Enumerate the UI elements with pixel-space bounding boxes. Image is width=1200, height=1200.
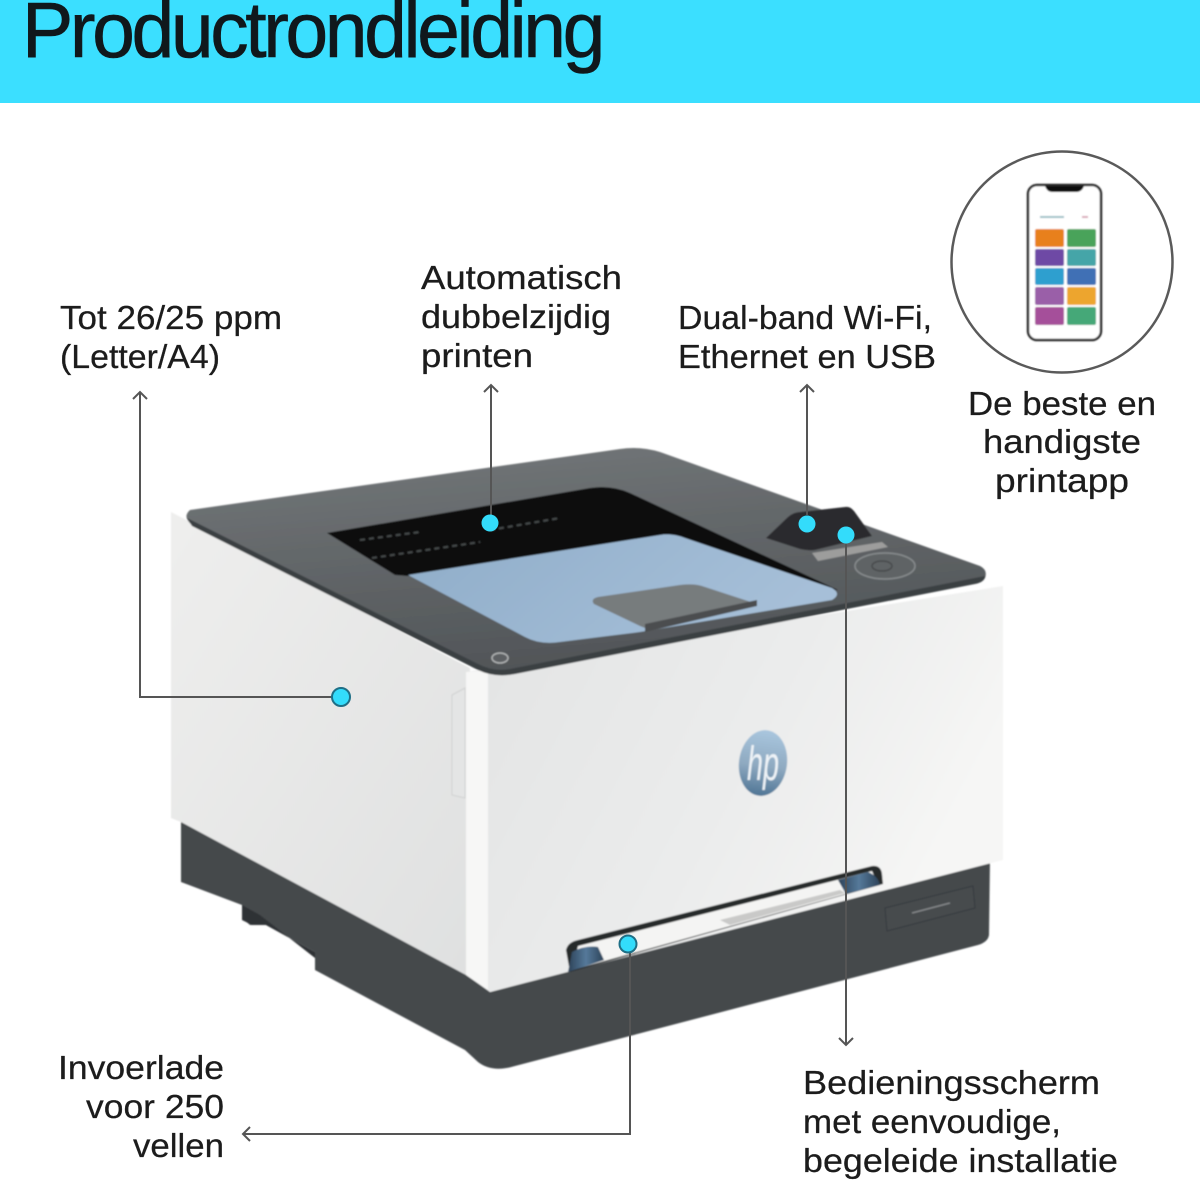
printer base (181, 820, 990, 1069)
header banner (0, 0, 1200, 103)
paper slot (566, 866, 883, 972)
lid front edge shadow (187, 518, 985, 675)
side latch (452, 688, 465, 798)
text: duplex: dubbelzijdig (421, 298, 611, 335)
hp logo (735, 727, 791, 799)
text: app: printapp (995, 462, 1129, 499)
control panel (766, 507, 915, 579)
hp logo: hp (747, 738, 779, 791)
text: duplex: printen (421, 337, 533, 374)
text: duplex: Automatisch (421, 259, 622, 296)
text: app: De beste en (968, 385, 1156, 422)
printer side panel (171, 512, 470, 975)
text: connectivity: Ethernet en USB (678, 338, 936, 375)
text: speed: Tot 26/25 ppm (60, 299, 282, 336)
phone app callout (952, 152, 1172, 372)
text: control panel: begeleide installatie (803, 1142, 1118, 1179)
model label plate (885, 886, 975, 931)
text: paper tray: vellen (133, 1127, 224, 1164)
printer front panel (466, 586, 1003, 992)
tray extension handle (593, 584, 757, 632)
marker: connectivity (798, 516, 816, 532)
text: duplex (421, 259, 622, 374)
output opening (327, 487, 838, 590)
front corner strip (466, 670, 488, 990)
arrow: control panel (839, 544, 853, 1045)
printer lid (186, 448, 986, 674)
marker: control panel (838, 526, 854, 544)
arrow: paper tray (243, 952, 630, 1141)
text: connectivity: Dual-band Wi-Fi, (678, 299, 932, 336)
text: connectivity (678, 299, 936, 375)
marker: speed (332, 688, 350, 706)
text: app: handigste (983, 423, 1141, 460)
marker: paper tray (620, 936, 636, 952)
output tray (408, 534, 837, 643)
smartphone (1028, 185, 1101, 340)
marker: duplex (482, 514, 498, 532)
text: speed (60, 299, 282, 375)
text: paper tray (58, 1049, 224, 1164)
arrow: speed (133, 392, 333, 697)
arrow: connectivity (800, 385, 814, 515)
lid puck (492, 653, 508, 663)
text: paper tray: Invoerlade (58, 1049, 224, 1086)
text: control panel: Bedieningsscherm (803, 1064, 1100, 1101)
text: paper tray: voor 250 (86, 1088, 224, 1125)
text: speed: (Letter/A4) (60, 338, 220, 375)
text: control panel: met eenvoudige, (803, 1103, 1061, 1140)
printer illustration (171, 448, 1003, 1069)
arrow: duplex (484, 385, 498, 515)
text: control panel (803, 1064, 1118, 1179)
text: app (968, 385, 1156, 499)
circle outline (952, 152, 1172, 372)
